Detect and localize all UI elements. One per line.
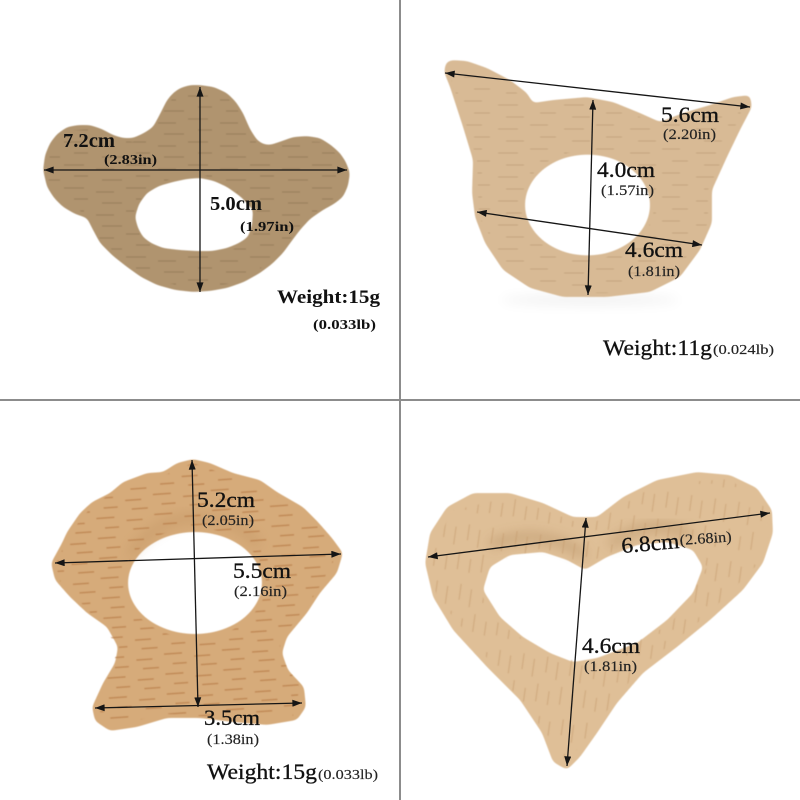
arrow: base width xyxy=(95,703,302,708)
top width inches label: (2.20in) xyxy=(663,127,716,143)
rim shading xyxy=(490,527,690,555)
arrow: lower width xyxy=(477,212,702,245)
rim shading xyxy=(130,518,258,555)
width inches label: (2.16in) xyxy=(234,584,287,600)
arrow: height xyxy=(567,518,586,766)
wooden cat shape xyxy=(444,60,752,297)
height label: 5.0cm xyxy=(210,193,262,215)
arrow: width xyxy=(44,169,347,171)
lower width label: 4.6cm xyxy=(625,237,683,262)
wooden shell shape xyxy=(51,459,343,731)
arrow: width xyxy=(55,554,341,563)
width inches label: (2.83in) xyxy=(104,153,157,168)
height inches label: (1.57in) xyxy=(601,183,654,199)
height inches label: (2.05in) xyxy=(202,513,254,529)
panel: cat teether xyxy=(444,60,774,360)
lower width inches label: (1.81in) xyxy=(628,264,680,280)
soft shadow xyxy=(500,295,680,305)
height label: 4.6cm xyxy=(582,633,640,658)
weight pounds label: (0.033lb) xyxy=(313,318,376,333)
width label: 5.5cm xyxy=(233,558,291,583)
width inches label: (2.68in) xyxy=(679,529,732,549)
arrow: height xyxy=(588,100,593,295)
weight pounds label: (0.024lb) xyxy=(713,343,774,358)
wooden cloud shape xyxy=(43,85,350,292)
height inches label: (1.97in) xyxy=(240,220,294,235)
weight pounds label: (0.033lb) xyxy=(318,768,378,783)
arrow: top width xyxy=(445,73,750,107)
wooden heart shape xyxy=(425,472,773,770)
height label: 4.0cm xyxy=(597,157,655,182)
height inches label: (1.81in) xyxy=(584,659,637,675)
base width inches label: (1.38in) xyxy=(207,732,259,748)
panel: heart teether xyxy=(425,472,773,770)
top width label: 5.6cm xyxy=(661,102,719,127)
weight label: Weight:11g xyxy=(603,335,712,360)
weight label: Weight:15g xyxy=(207,759,317,784)
weight label: Weight:15g xyxy=(277,287,381,308)
base width label: 3.5cm xyxy=(204,705,260,730)
height label: 5.2cm xyxy=(197,487,255,512)
panel: shell teether xyxy=(51,459,378,784)
width label: 6.8cm xyxy=(620,528,680,558)
arrow: height xyxy=(192,460,198,707)
arrow: height xyxy=(199,87,201,292)
arrow: width xyxy=(428,513,770,557)
panel: cloud teether xyxy=(43,85,381,333)
width label: 7.2cm xyxy=(63,130,115,152)
